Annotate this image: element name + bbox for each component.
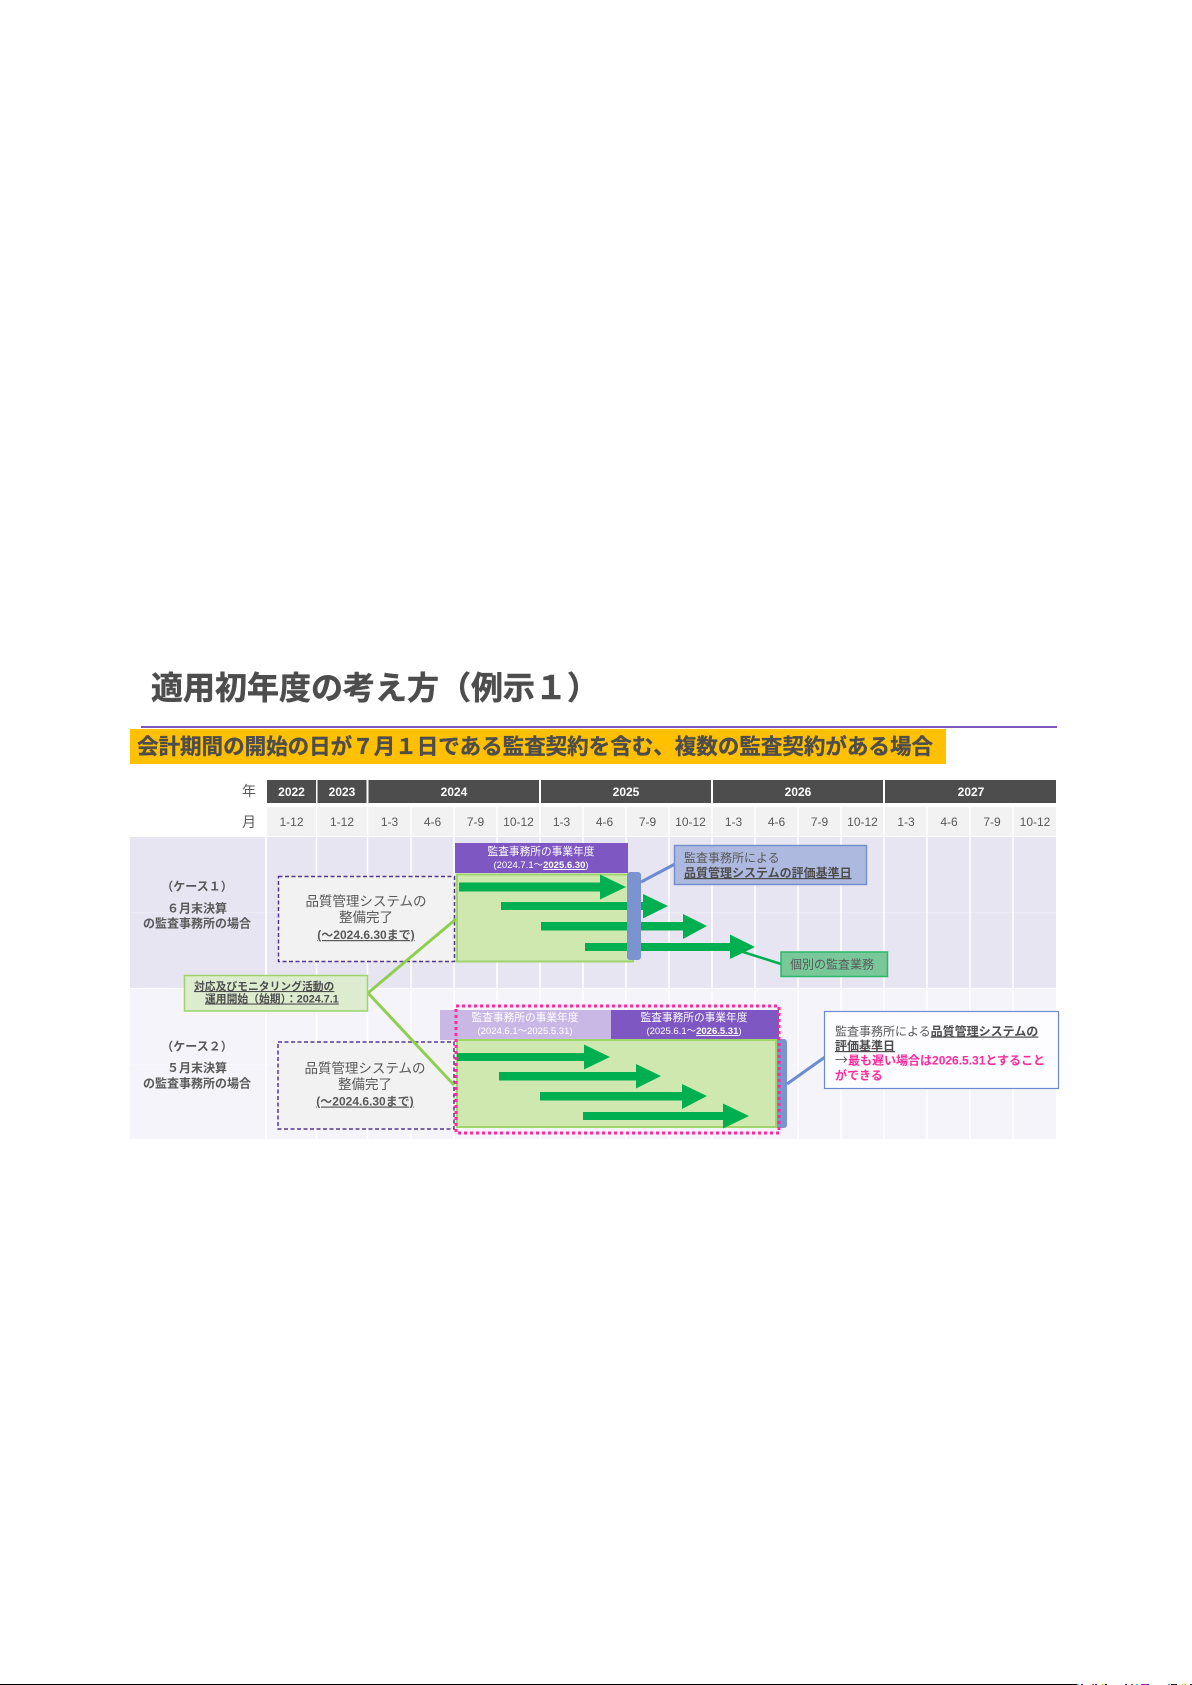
subtitle banner [130,729,946,764]
case 2 dashed box: system completed: 品質管理システムの [304,1061,426,1076]
case 1 dashed box: system completed: 品質管理システムの [305,894,427,909]
month header row: 10-12 [1020,815,1051,829]
case 1 label [143,880,251,930]
case 2 arrows [457,1044,749,1128]
case 2 dashed box: system completed: (～2024.6.30まで) [316,1094,414,1108]
case 2 fiscal year header, second: (2025.6.1～2026.5.31) [646,1026,742,1037]
case 1 evaluation callout: 品質管理システムの評価基準日 [684,865,852,880]
case 2 pink dotted range [456,1006,779,1133]
case 2 evaluation callout [824,1012,1058,1088]
case 1 arrows [459,874,755,959]
individual audit label [781,952,888,976]
case 1 label: の監査事務所の場合 [143,916,251,930]
month header row: 1-3 [897,815,915,829]
case 2 label: （ケース２） [161,1040,233,1054]
bottom scan edge [0,1684,1192,1685]
individual audit connector [740,951,781,964]
case 2 evaluation callout: 監査事務所による品質管理システムの [835,1024,1038,1038]
case 2 green period box [457,1040,776,1127]
month header row: 4-6 [768,815,785,829]
case 2 label: の監査事務所の場合 [143,1076,251,1090]
month header row: 10-12 [503,815,534,829]
start-of-operation note: 対応及びモニタリング活動の [194,979,334,993]
year header row: 2025 [613,785,640,799]
case 1 evaluation callout: 監査事務所による [684,850,780,865]
month header row: 7-9 [983,815,1001,829]
case 2 dashed box: system completed: 整備完了 [338,1077,392,1092]
case 2 blue evaluation marker [774,1039,787,1128]
case 1 label: ６月末決算 [167,900,227,916]
title divider line [141,726,1057,728]
case 2 label [143,1040,251,1090]
start-of-operation note: 運用開始（始期）：2024.7.1 [205,992,339,1006]
month header row: 4-6 [940,815,958,829]
row label: month: 月 [242,814,256,830]
case 1 evaluation connector [641,864,675,882]
year header row: 2023 [329,785,356,799]
case 2 fiscal year header, second [611,1010,779,1040]
month header row: 1-12 [330,815,354,829]
panel: case 1 band [130,837,1056,988]
case 2 fiscal year header, first: 監査事務所の事業年度 [472,1011,579,1024]
year header row [267,780,1056,803]
start-of-operation note [184,976,368,1011]
case 1 dashed box: system completed: (～2024.6.30まで) [317,928,415,942]
month header row: 10-12 [675,815,706,829]
month header row: 4-6 [596,815,613,829]
month header row: 1-3 [553,815,570,829]
case 2 fiscal year header, second: 監査事務所の事業年度 [641,1011,748,1024]
case 1 label: （ケース１） [161,880,233,894]
year header row: 2022 [278,785,305,799]
case 1 fiscal year header: (2024.7.1～2025.6.30) [493,860,589,871]
case 2 evaluation connector [787,1057,825,1084]
case 1 dashed box: system completed: 整備完了 [339,910,393,925]
month header row: 4-6 [424,815,441,829]
case 1 fiscal year header: 監査事務所の事業年度 [488,845,595,858]
year header row: 2024 [441,785,468,799]
connector lines from start-of-operation note [368,919,456,1085]
month header row: 7-9 [639,815,656,829]
case 1 green period box [457,874,633,962]
case 2 fiscal year header, first [440,1010,611,1040]
year header row: 2026 [785,785,812,799]
case 2 fiscal year header, first: (2024.6.1～2025.5.31) [477,1026,573,1037]
panel: case 2 band [130,989,1056,1139]
case 1 fiscal year header [455,843,628,873]
month header row: 7-9 [467,815,484,829]
subtitle banner: 会計期間の開始の日が７月１日である監査契約を含む、複数の監査契約がある場合 [137,734,933,759]
month header row: 10-12 [847,815,878,829]
year header row: 2027 [958,785,985,799]
case 2 evaluation callout: 評価基準日 [835,1038,895,1053]
month header row: 1-12 [279,815,304,829]
case 1 dashed box: system completed [278,876,454,962]
case 1 blue evaluation marker [627,872,641,960]
row label: year: 年 [242,783,256,799]
case 2 dashed box: system completed [278,1042,454,1129]
individual audit label: 個別の監査業務 [790,956,874,972]
case 2 label: ５月末決算 [167,1060,227,1075]
case 1 evaluation callout [674,846,866,884]
month header row [267,807,1056,836]
month header row: 7-9 [811,815,828,829]
month header row: 1-3 [381,815,398,829]
month header row: 1-3 [725,815,742,829]
title: 適用初年度の考え方（例示１） [151,670,599,706]
case 2 evaluation callout: →最も遅い場合は2026.5.31とすること [835,1050,1045,1068]
case 2 evaluation callout: ができる [835,1068,883,1082]
